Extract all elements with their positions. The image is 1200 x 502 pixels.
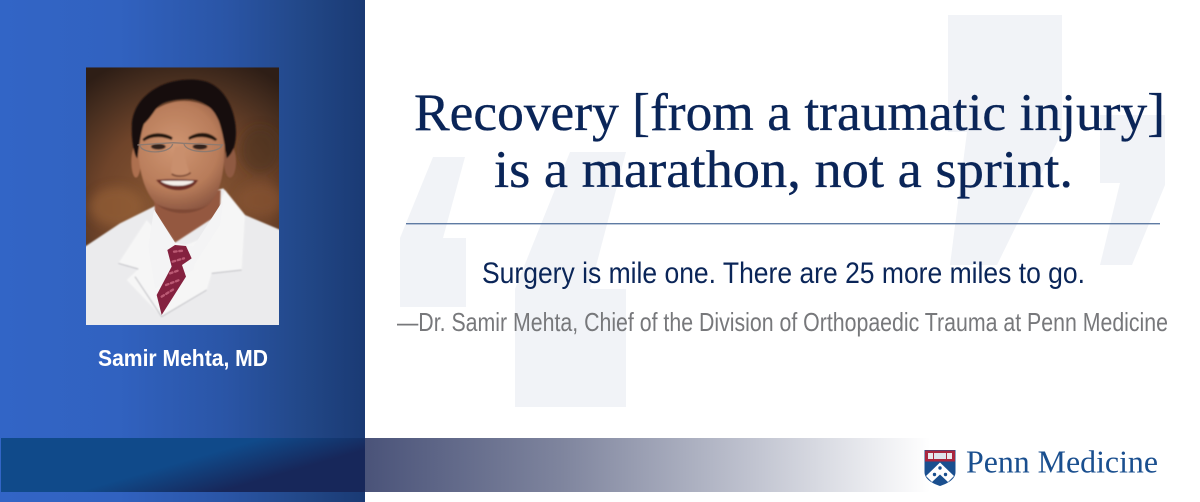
caption: doctor's name: Samir Mehta, MD <box>98 345 268 371</box>
coat <box>86 188 279 325</box>
Penn Medicine logo <box>924 444 1158 486</box>
decorative quotation marks <box>400 15 1165 407</box>
supporting line: Surgery is mile one. There are 25 more miles to go. <box>482 257 1085 290</box>
quote heading: Recovery [from a traumatic injury] <box>414 84 1165 142</box>
neck and face <box>131 79 236 243</box>
shirt <box>152 203 222 246</box>
bottom band: left dark segment <box>1 438 365 492</box>
glasses <box>137 143 223 152</box>
bottom band: right fading segment <box>365 438 930 492</box>
quote heading <box>414 84 1165 199</box>
icon: Penn shield <box>924 450 956 486</box>
brows and eyes <box>142 133 217 141</box>
hair <box>132 79 236 158</box>
portrait photo of Samir Mehta <box>80 67 287 333</box>
quote heading: is a marathon, not a sprint. <box>494 141 1073 199</box>
divider rule <box>406 223 1160 224</box>
logo wordmark: Penn Medicine <box>966 444 1158 480</box>
panel: blue sidebar <box>0 0 365 502</box>
tie <box>157 245 192 315</box>
